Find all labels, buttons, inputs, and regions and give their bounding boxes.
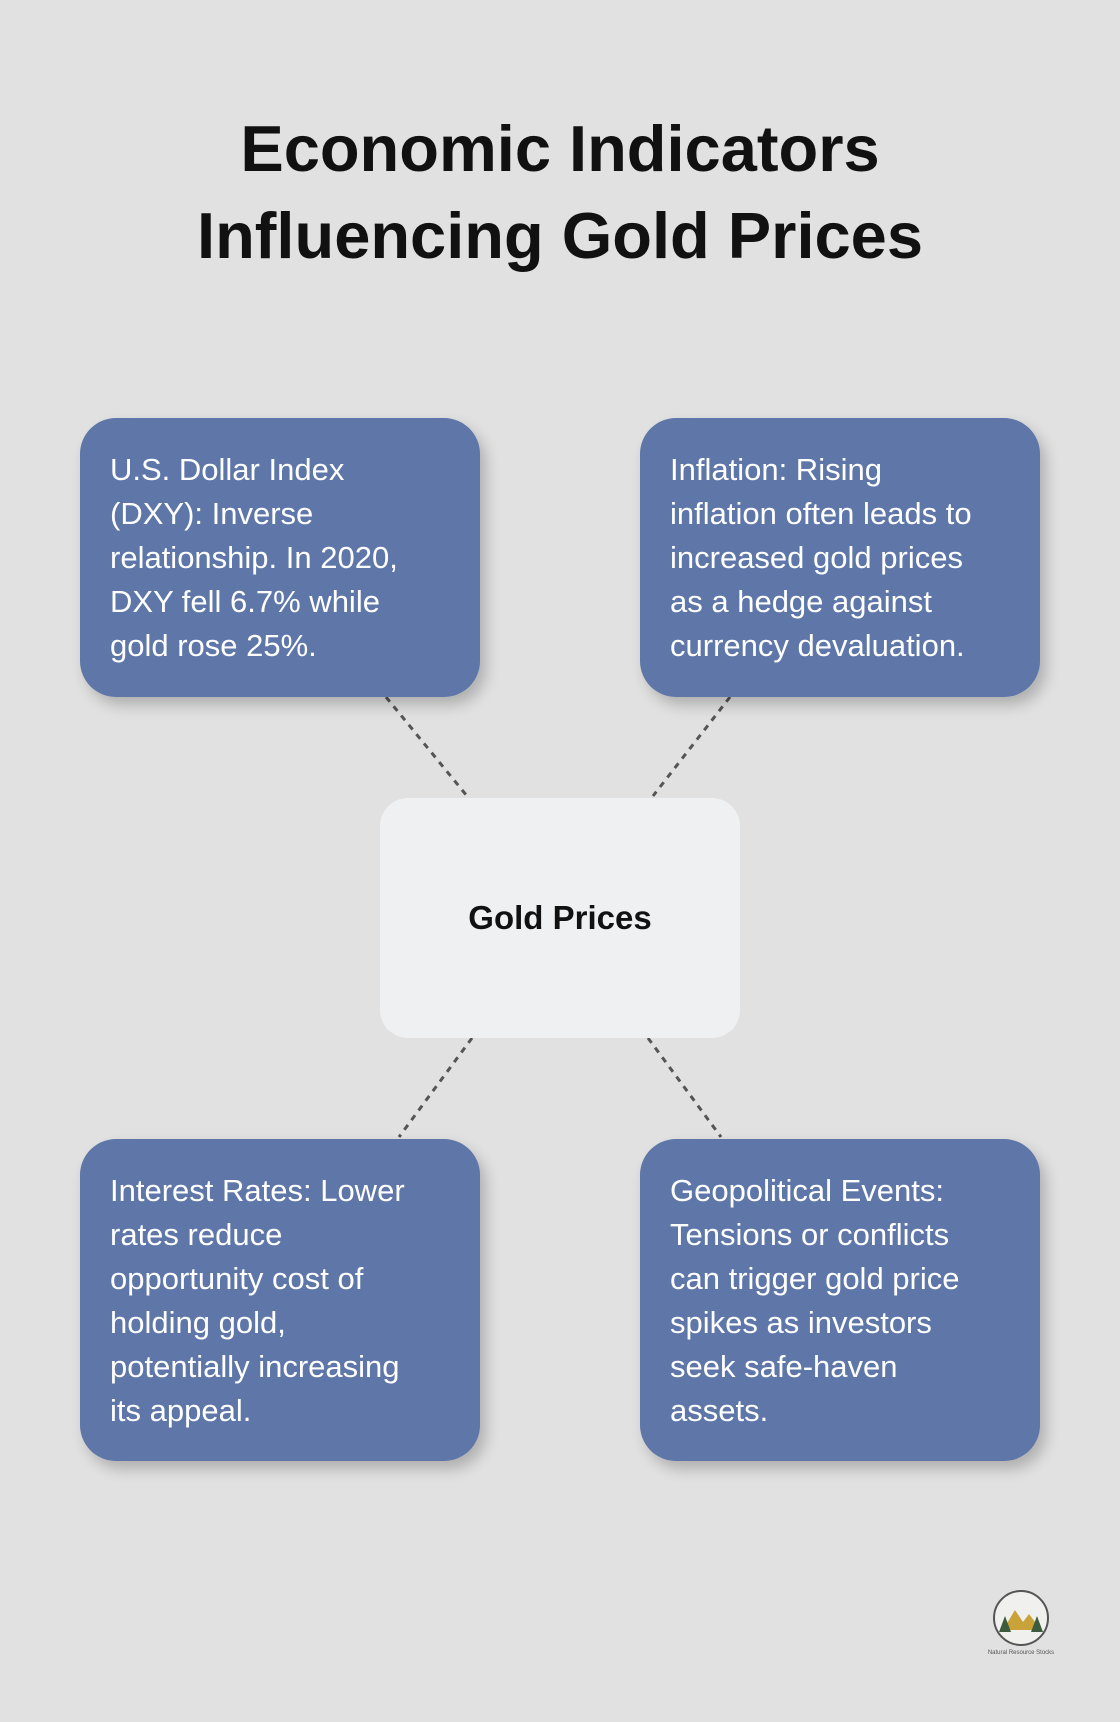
icon: logo bbox=[988, 1590, 1054, 1656]
panel: inflation: Inflation: Rising bbox=[670, 452, 882, 487]
panel: interest rates: potentially increasing bbox=[110, 1349, 400, 1384]
title: Influencing Gold Prices bbox=[197, 199, 923, 272]
panel: geopolitical events: Geopolitical Events: bbox=[670, 1173, 944, 1208]
panel: geopolitical events bbox=[640, 1139, 1040, 1461]
title bbox=[197, 112, 923, 272]
panel: geopolitical events: seek safe-haven bbox=[670, 1349, 897, 1384]
panel: inflation bbox=[640, 418, 1040, 697]
panel: geopolitical events: can trigger gold price bbox=[670, 1261, 960, 1296]
panel: dollar index bbox=[80, 418, 480, 697]
panel: dollar index: U.S. Dollar Index bbox=[110, 452, 344, 487]
center node: gold prices: Gold Prices bbox=[468, 899, 652, 936]
panel: interest rates: rates reduce bbox=[110, 1217, 282, 1252]
panel: interest rates: holding gold, bbox=[110, 1305, 286, 1340]
panel: inflation: currency devaluation. bbox=[670, 628, 965, 663]
panel: geopolitical events: Tensions or conflicts bbox=[670, 1217, 949, 1252]
icon: logo: Natural Resource Stocks bbox=[988, 1650, 1054, 1656]
panel: geopolitical events: spikes as investors bbox=[670, 1305, 932, 1340]
panel: inflation: as a hedge against bbox=[670, 584, 932, 619]
panel: geopolitical events: assets. bbox=[670, 1393, 768, 1428]
panel: interest rates: its appeal. bbox=[110, 1393, 251, 1428]
panel: inflation: inflation often leads to bbox=[670, 496, 972, 531]
panel: dollar index: (DXY): Inverse bbox=[110, 496, 313, 531]
panel: dollar index: gold rose 25%. bbox=[110, 628, 317, 663]
panel: dollar index: relationship. In 2020, bbox=[110, 540, 398, 575]
title: Economic Indicators bbox=[240, 112, 880, 185]
panel: interest rates: opportunity cost of bbox=[110, 1261, 363, 1296]
panel: inflation: increased gold prices bbox=[670, 540, 963, 575]
panel: interest rates: Interest Rates: Lower bbox=[110, 1173, 405, 1208]
panel: interest rates bbox=[80, 1139, 480, 1461]
center node: gold prices bbox=[380, 798, 740, 1038]
panel: dollar index: DXY fell 6.7% while bbox=[110, 584, 380, 619]
